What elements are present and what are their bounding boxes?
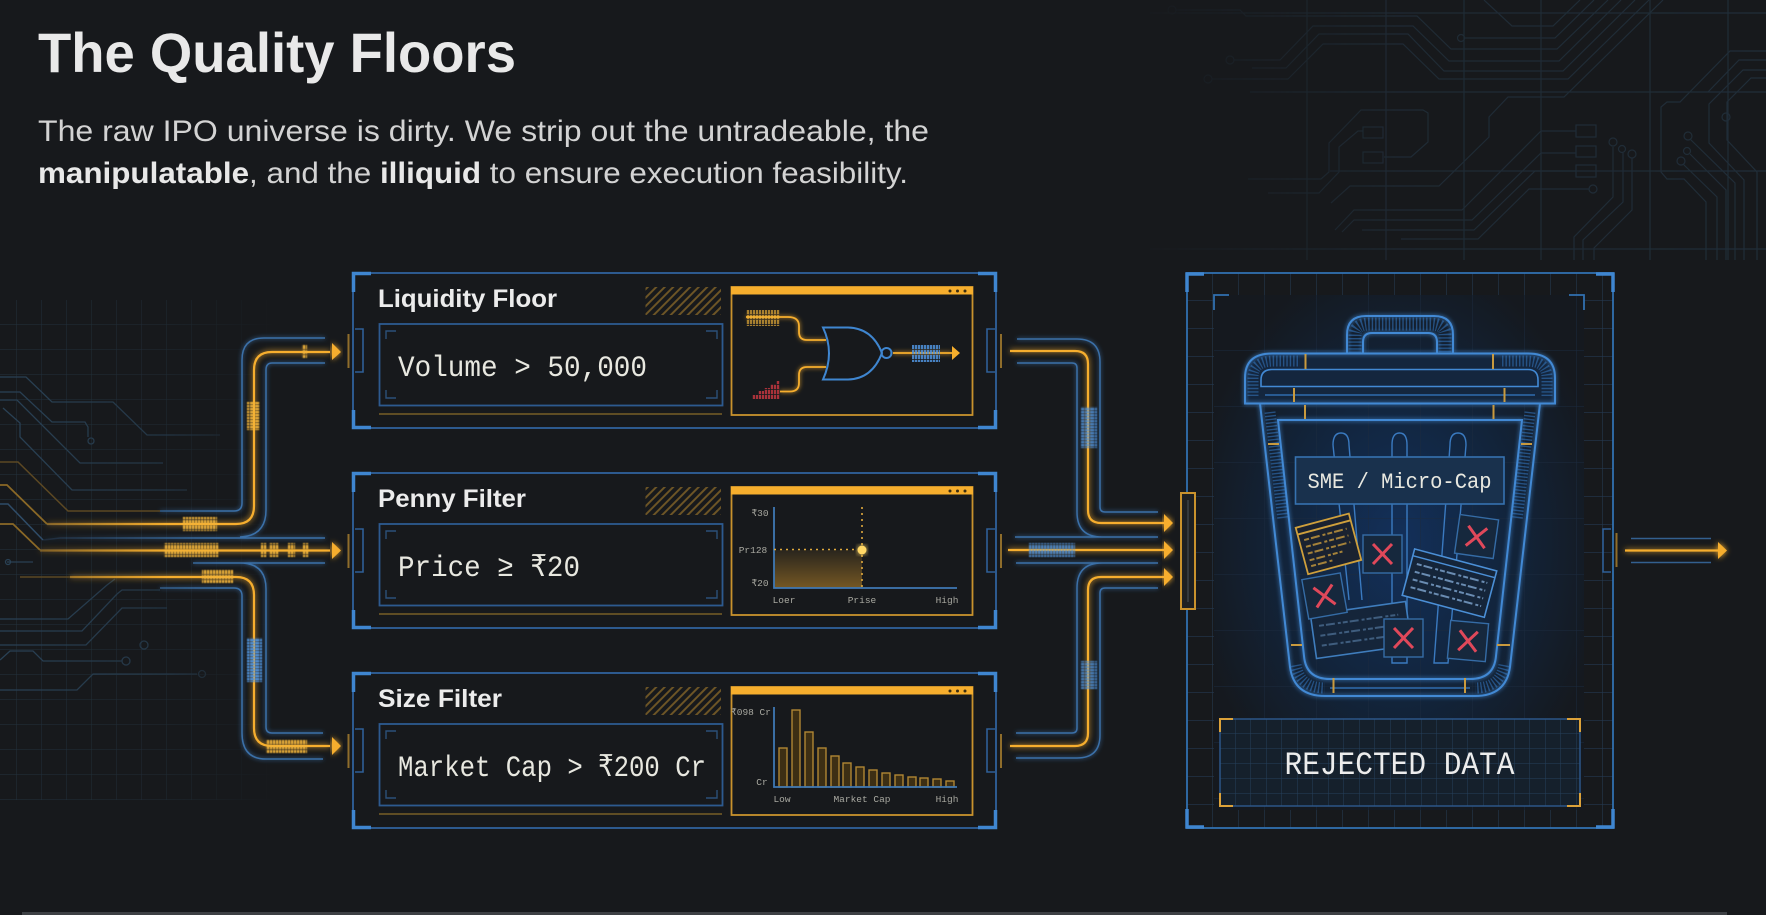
inner field with blue glow: [1214, 295, 1584, 810]
label: SME / Micro-Cap: SME / Micro-Cap: [1308, 470, 1492, 495]
title: The Quality Floors: [38, 21, 516, 84]
bin body: [1260, 404, 1540, 696]
footer divider: [22, 912, 1727, 915]
mini window: price threshold chart: High: [936, 595, 958, 606]
heading: Size Filter: [378, 685, 502, 713]
rejected marker C: [1302, 573, 1347, 619]
subtitle: [38, 115, 929, 190]
mini window: market-cap histogram: Cr: [756, 777, 768, 788]
rejected data card: amber: [1296, 514, 1361, 574]
arrowheads: [332, 343, 341, 755]
background circuit traces: top right: [1218, 0, 1766, 260]
rule box: [380, 524, 722, 606]
data packets: [164, 345, 309, 753]
mini window: market-cap histogram: High: [936, 794, 958, 805]
footer label: REJECTED DATA: [1220, 719, 1580, 806]
rejected marker A: [1363, 535, 1402, 573]
rule box: [380, 324, 722, 406]
mini window: price threshold chart: ₹20: [751, 578, 769, 589]
input connector: [1181, 493, 1195, 609]
rule box: [380, 724, 722, 806]
output flows: into rejected bin: [1008, 339, 1173, 758]
side connectors: [348, 529, 1001, 572]
heading: Penny Filter: [378, 485, 526, 513]
rejected marker D: [1384, 619, 1423, 657]
background circuit traces and grid: left: [0, 300, 241, 800]
bin handle: [1347, 316, 1453, 353]
mini window: market-cap histogram: Market Cap: [833, 794, 891, 805]
rule box: Market Cap > ₹200 Cr: [398, 752, 706, 786]
output tab: [1603, 529, 1616, 572]
panel: rejected data: [1181, 273, 1616, 828]
label: SME / Micro-Cap: [1296, 457, 1504, 504]
rejected marker B: [1455, 514, 1499, 559]
rejected data card: blue right: [1402, 549, 1497, 617]
subtitle: The raw IPO universe is dirty. We strip out the untradeable, the: [38, 115, 929, 148]
mini window: price threshold chart: Prise: [848, 595, 877, 606]
mini window: NOR gate: [731, 286, 973, 415]
rejected marker E: [1447, 620, 1489, 662]
rule box: Volume > 50,000: [398, 352, 647, 386]
side connectors: [348, 729, 1001, 772]
arrowheads: [1164, 514, 1173, 586]
data packets: [1029, 407, 1097, 689]
panel: Penny Filter: [348, 473, 1001, 628]
mini window: market-cap histogram: Low: [773, 794, 791, 805]
mini window: market-cap histogram: [731, 686, 973, 815]
panel: Size Filter: [348, 673, 1001, 828]
blue guide rails: [43, 338, 325, 759]
mini window: price threshold chart: Loer: [773, 595, 795, 606]
mini window: price threshold chart: ₹30: [751, 508, 769, 519]
side connectors: [348, 329, 1001, 372]
input flows: left routing: [0, 338, 341, 759]
output arrow: [1625, 538, 1727, 562]
bin lid: [1245, 354, 1555, 404]
amber flow lines: [40, 352, 330, 746]
mini window: market-cap histogram: ₹098 Cr: [731, 707, 771, 718]
heading: Liquidity Floor: [378, 285, 557, 313]
panel: Liquidity Floor: [348, 273, 1001, 428]
mini window: price threshold chart: Pr128: [739, 545, 768, 556]
icon: trash bin: [1245, 316, 1555, 696]
inner slots: [1333, 433, 1466, 663]
rule box: Price ≥ ₹20: [398, 552, 580, 586]
rejected data card: blue bottom: [1310, 602, 1412, 658]
subtitle: manipulatable , and the illiquid to ensure execution feasibility.: [38, 157, 908, 190]
mini window: price threshold chart: [731, 486, 973, 615]
footer label: REJECTED DATA: REJECTED DATA: [1284, 747, 1515, 784]
